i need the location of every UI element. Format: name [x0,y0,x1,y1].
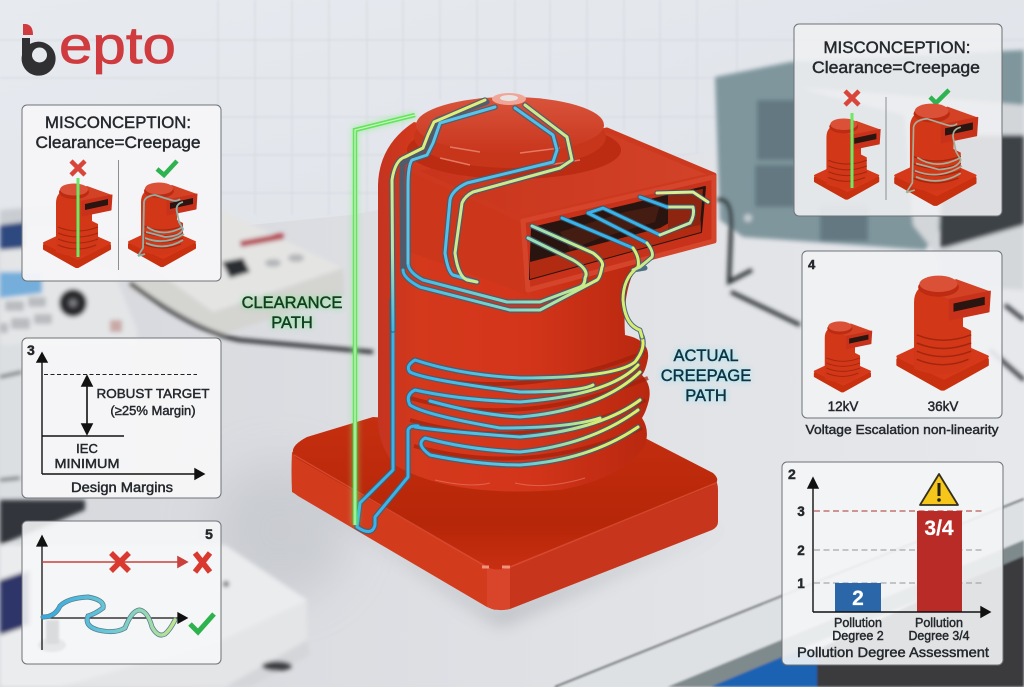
square base [292,417,718,610]
mini insulator with straight clearance [44,178,112,267]
mini insulator with creepage path [129,182,197,266]
axes [37,353,204,479]
mini insulator with straight clearance [815,113,880,199]
bar value: 2: 2 [852,587,864,610]
label: actual creepage path: PATH [685,387,727,405]
icon: green check [930,90,949,103]
soft table tone [210,460,350,600]
logo wordmark: epto [59,17,176,75]
logo: bepto [22,17,176,76]
body bottom highlights [435,478,585,486]
robust target label: ROBUST TARGET [96,386,210,401]
panel: misconception, right [794,24,1002,216]
flange box [412,130,714,291]
IEC minimum label: MINIMUM [54,456,120,471]
creepage path: routes over flange and cap [392,100,603,330]
icon: red cross on line [111,553,129,571]
axes [808,478,990,617]
IEC minimum label: IEC [76,441,98,456]
right instrument [715,50,1024,380]
base shadow [300,490,725,625]
voltage labels: 36kV [928,399,958,414]
rib shadows [410,352,648,458]
bar labels: Pollution [834,616,882,630]
tick labels: 3 [797,504,805,519]
label: actual creepage path: CREEPAGE [661,367,751,385]
clearance path: straight green line [355,115,415,525]
left instrument [0,205,137,500]
panel number: 4 [808,257,816,272]
label: clearance path: PATH [271,314,313,332]
red straight arrow [42,557,187,567]
label: actual creepage path: ACTUAL [673,347,739,365]
round cap [407,93,621,179]
panel 5: straight vs winding path [22,521,221,664]
bar labels: Pollution [915,616,963,630]
bar: pollution degree 3/4 [917,511,962,612]
axes [37,536,187,650]
margin arrow [82,376,92,434]
bar labels: Degree 2 [832,629,884,643]
bottom-right table edge and dark floor [555,499,1024,687]
icon: warning triangle [920,474,958,505]
cylindrical body with ribs [378,122,650,492]
tick labels: 2 [797,543,805,558]
panel 3: design margins [22,338,221,498]
winding creepage curve [43,597,175,635]
creepage path: loops inside the flange opening [562,192,708,337]
panel caption: Pollution Degree Assessment [797,644,989,660]
grid lines [814,511,984,583]
robust target label: (≥25% Margin) [110,403,196,418]
robust target dashed line [44,374,197,376]
caption: voltage escalation: Voltage Escalation non-linearity [806,422,999,437]
bottom-left instrument [0,500,310,687]
panel caption: Design Margins [71,480,173,495]
panel number: 5 [205,526,213,542]
creepage path: coils around ribs [357,300,643,532]
middle bench unit [120,210,373,352]
icon: red cross [845,91,859,105]
panel number: 2 [788,466,796,482]
panel 4: voltage escalation [802,251,1002,418]
bar value: 3/4: 3/4 [924,517,954,540]
panel heading: Clearance=Creepage [36,134,200,152]
panel heading: Clearance=Creepage [812,59,980,77]
ghost insulator [38,620,66,652]
bar labels: Degree 3/4 [908,629,970,643]
icon: green check [190,614,214,632]
12kV insulator [815,321,872,392]
voltage labels: 12kV [828,399,858,414]
icon: red cross [71,161,85,175]
wall with tiles [0,0,1024,300]
panel number: 3 [27,342,35,358]
mini insulator with creepage path [895,104,978,205]
bar: pollution degree 2 [835,583,881,612]
36kV insulator [898,276,990,389]
table surface [0,140,1024,687]
divider [885,97,887,200]
panel heading: MISCONCEPTION: [45,114,191,132]
label: clearance path: CLEARANCE [242,294,342,312]
logo mark [22,24,56,76]
panel: misconception, left [22,105,221,281]
panel heading: MISCONCEPTION: [824,39,970,57]
main insulator: 3D red epoxy bushing [292,93,725,625]
icon: red cross end [195,553,210,572]
IEC minimum line [42,435,124,437]
divider [118,160,120,270]
tick labels: 1 [797,576,805,591]
icon: green check [157,161,177,175]
panel 2: pollution degree assessment [782,462,1003,665]
